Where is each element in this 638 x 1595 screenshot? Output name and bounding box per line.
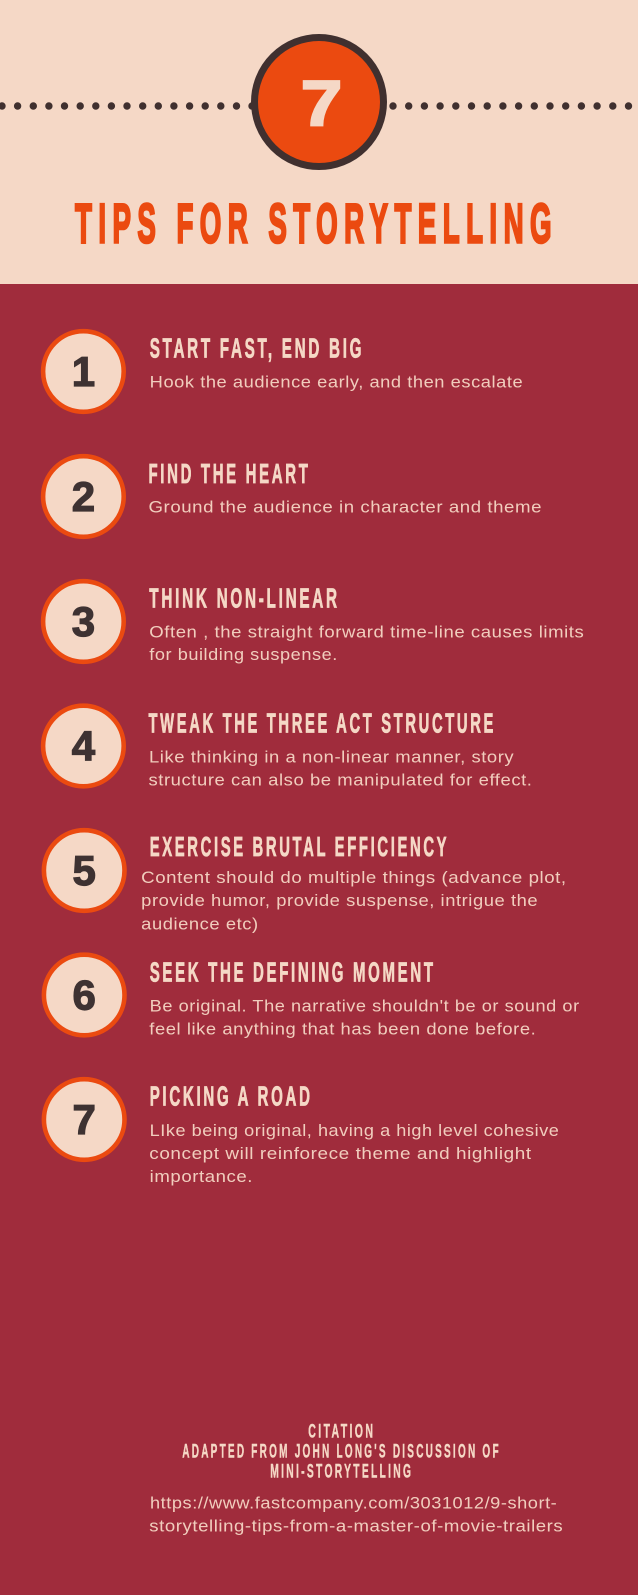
body 7 [149,1122,559,1186]
number badge 2 [43,456,124,537]
citation link: https://www.fastcompany.com/3031012/9-short- [150,1494,557,1512]
body 5: provide humor, provide suspense, intrigue the [141,892,538,910]
body 6: feel like anything that has been done before. [149,1021,536,1039]
heading 7: PICKING A ROAD [150,1080,313,1112]
header panel [0,0,638,284]
number badge 1: 1 [72,348,95,395]
tip 3 [43,581,584,664]
body 7: concept will reinforece theme and highlight [149,1145,532,1163]
body 3: for building suspense. [149,646,338,664]
tip 7 [44,1079,559,1186]
tip 2 [43,456,542,537]
number badge 3 [43,581,124,662]
number badge 5 [44,830,125,911]
body 5: Content should do multiple things (advance plot, [141,869,567,887]
body 4: structure can also be manipulated for effect. [148,772,532,790]
heading 1: START FAST, END BIG [150,332,364,364]
number badge 4: 4 [72,722,96,770]
body 7: importance. [150,1168,253,1186]
number badge 3: 3 [72,598,95,645]
body 5 [141,869,567,933]
number badge 6: 6 [73,972,96,1018]
number badge 4 [43,706,124,786]
number badge 7: 7 [73,1096,96,1143]
citation heading: MINI-STORYTELLING [270,1461,413,1482]
body 3: Often , the straight forward time-line causes limits [149,623,584,641]
heading 2: FIND THE HEART [148,458,310,489]
body 5: audience etc) [141,915,259,933]
tip 4 [43,706,532,790]
tip 5 [44,830,567,933]
citation heading: CITATION [308,1421,375,1442]
badge: big seven: 7 [301,67,342,139]
citation link: storytelling-tips-from-a-master-of-movie-trailers [149,1517,563,1535]
tip 1 [43,331,523,412]
body 3 [149,623,584,664]
badge: big seven [254,38,384,166]
number badge 2: 2 [72,473,95,520]
citation heading [182,1421,501,1482]
body 4: Like thinking in a non-linear manner, story [149,749,514,767]
body 6 [149,998,580,1039]
number badge 5: 5 [73,847,96,894]
body 4 [148,749,532,790]
number badge 1 [43,331,124,412]
body 2: Ground the audience in character and theme [148,499,542,517]
body 6: Be original. The narrative shouldn't be or sound or [150,998,580,1016]
tip 6 [44,955,580,1039]
citation link [149,1494,563,1535]
number badge 7 [44,1079,125,1160]
number badge 6 [44,955,125,1035]
body 7: LIke being original, having a high level cohesive [150,1122,559,1140]
body 1: Hook the audience early, and then escalate [150,374,523,392]
dotted line [0,102,632,110]
heading 3: THINK NON-LINEAR [149,582,340,614]
